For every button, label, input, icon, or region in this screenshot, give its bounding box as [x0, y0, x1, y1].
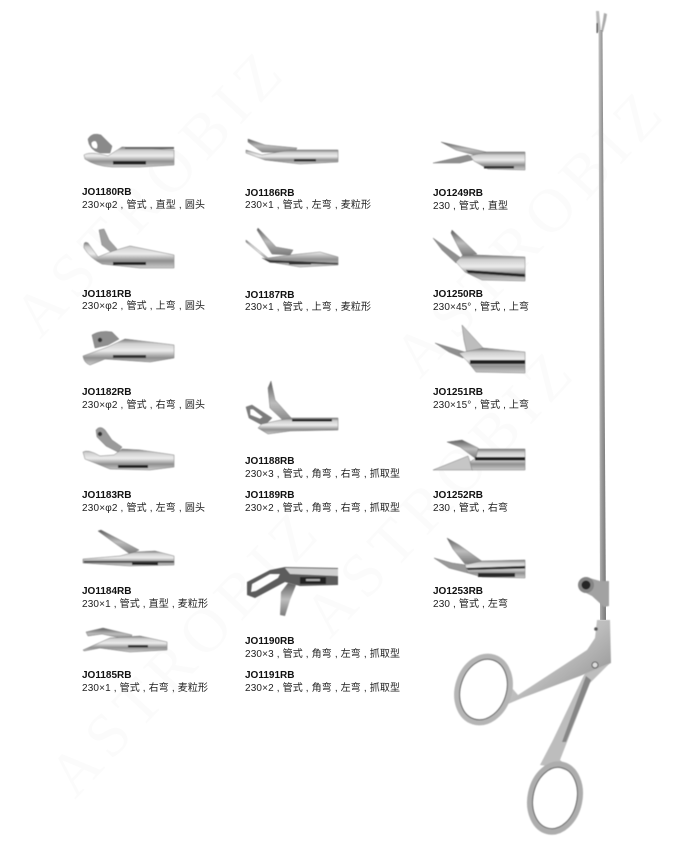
label: JO1180RB	[82, 187, 205, 211]
label: JO1182RB	[82, 387, 205, 411]
label: JO1184RB: JO1184RB	[82, 586, 131, 597]
label: JO1181RB	[82, 289, 205, 312]
label: JO1189RB: 230×2 , 管式 , 角弯 , 右弯 , 抓取型	[245, 501, 400, 514]
full instrument: long forceps	[449, 11, 611, 836]
thumbnail: JO1184RB	[83, 530, 174, 566]
label: JO1188RB: 230×3 , 管式 , 角弯 , 右弯 , 抓取型	[245, 467, 400, 480]
watermark: ASTROBIZ	[381, 75, 681, 390]
thumbnail: JO1251RB	[435, 325, 525, 373]
label: JO1184RB: 230×1 , 管式 , 直型 , 麦粒形	[82, 597, 208, 610]
label: JO1191RB: JO1191RB	[245, 670, 294, 681]
lower handle with ring	[524, 663, 610, 836]
label: JO1186RB: JO1186RB	[245, 188, 294, 199]
thumbnail: JO1252RB	[433, 440, 525, 470]
label: JO1190RB: 230×3 , 管式 , 角弯 , 左弯 , 抓取型	[245, 647, 400, 660]
thumbnail: JO1186RB	[246, 139, 338, 164]
label: JO1190RB: JO1190RB	[245, 636, 294, 647]
shaft	[598, 30, 606, 620]
thumbnail: JO1185RB	[83, 628, 167, 652]
label: JO1180RB: JO1180RB	[82, 187, 131, 198]
thumbnail: JO1180RB	[84, 134, 174, 167]
label: JO1181RB: 230×φ2 , 管式 , 上弯 , 圆头	[82, 299, 205, 312]
label: JO1191RB: 230×2 , 管式 , 角弯 , 左弯 , 抓取型	[245, 681, 400, 694]
thumbnail: JO1181RB	[84, 229, 174, 268]
thumbnail: JO1190RB	[247, 567, 338, 616]
label: JO1187RB: 230×1 , 管式 , 上弯 , 麦粒形	[245, 300, 371, 313]
label: JO1250RB: 230×45° , 管式 , 上弯	[433, 300, 529, 313]
label: JO1189RB: JO1189RB	[245, 490, 294, 501]
label: JO1185RB	[82, 670, 208, 694]
label: JO1250RB: JO1250RB	[433, 289, 483, 300]
label: JO1253RB	[433, 586, 508, 610]
label: JO1183RB: 230×φ2 , 管式 , 左弯 , 圆头	[82, 501, 205, 514]
label: JO1252RB: 230 , 管式 , 右弯	[433, 501, 508, 514]
label: JO1185RB: 230×1 , 管式 , 右弯 , 麦粒形	[82, 681, 208, 694]
thumbnail: JO1188RB	[246, 381, 338, 434]
watermark: ASTROBIZ	[291, 335, 591, 650]
label: JO1181RB: JO1181RB	[82, 289, 131, 300]
label: JO1189RB	[245, 490, 400, 514]
label: JO1188RB: JO1188RB	[245, 456, 294, 467]
label: JO1180RB: 230×φ2 , 管式 , 直型 , 圆头	[82, 198, 205, 211]
label: JO1184RB	[82, 586, 208, 610]
label: JO1185RB: JO1185RB	[82, 670, 131, 681]
label: JO1253RB: 230 , 管式 , 左弯	[433, 597, 508, 610]
jaw tip	[596, 11, 607, 33]
label: JO1253RB: JO1253RB	[433, 586, 483, 597]
label: JO1182RB: JO1182RB	[82, 387, 131, 398]
label: JO1186RB: 230×1 , 管式 , 左弯 , 麦粒形	[245, 198, 371, 211]
thumbnail: JO1250RB	[433, 230, 525, 281]
label: JO1249RB: JO1249RB	[433, 188, 483, 199]
label: JO1251RB	[433, 387, 529, 411]
watermark: ASTROBIZ	[1, 35, 301, 350]
thumbnail: JO1253RB	[434, 538, 525, 578]
label: JO1190RB	[245, 636, 400, 660]
label: JO1252RB: JO1252RB	[433, 490, 483, 501]
label: JO1251RB: 230×15° , 管式 , 上弯	[433, 398, 529, 411]
label: JO1187RB	[245, 290, 371, 313]
watermark: ASTROBIZ	[36, 495, 336, 810]
upper handle with ring	[449, 620, 611, 729]
label: JO1191RB	[245, 670, 400, 694]
thumbnail: JO1249RB	[433, 142, 525, 170]
label: JO1250RB	[433, 289, 529, 313]
thumbnail: JO1187RB	[246, 228, 338, 267]
label: JO1183RB: JO1183RB	[82, 490, 131, 501]
label: JO1188RB	[245, 456, 400, 480]
label: JO1251RB: JO1251RB	[433, 387, 483, 398]
thumbnail: JO1182RB	[83, 331, 174, 365]
lock knob	[578, 577, 609, 607]
label: JO1186RB	[245, 188, 371, 211]
label: JO1252RB	[433, 490, 508, 514]
label: JO1187RB: JO1187RB	[245, 290, 294, 301]
label: JO1182RB: 230×φ2 , 管式 , 右弯 , 圆头	[82, 398, 205, 411]
label: JO1249RB: 230 , 管式 , 直型	[433, 199, 508, 212]
label: JO1183RB	[82, 490, 205, 514]
thumbnail: JO1183RB	[83, 428, 174, 470]
label: JO1249RB	[433, 188, 508, 212]
